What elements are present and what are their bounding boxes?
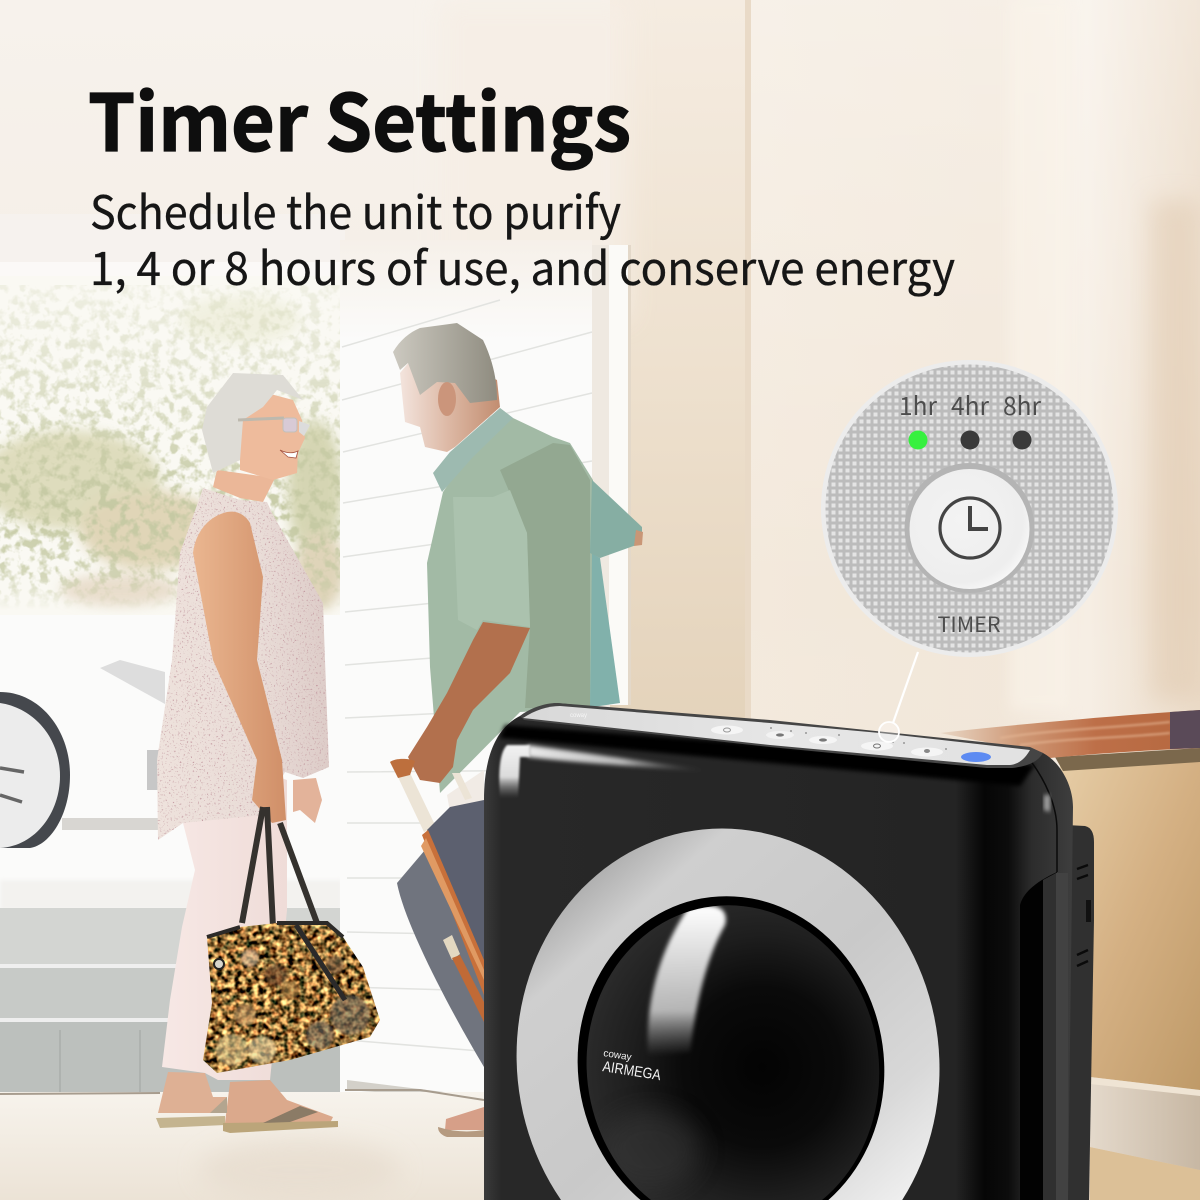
indicator: 1hr active <box>908 430 928 450</box>
side handle recess <box>1020 872 1057 1200</box>
man's back panel <box>500 443 590 708</box>
subtitle: Schedule the unit to purify <box>90 177 621 243</box>
logo: AIRMEGA <box>601 1057 663 1083</box>
feet and sandals <box>156 1072 338 1133</box>
timer labels: 8hr <box>1003 387 1041 423</box>
man's collar <box>433 408 513 492</box>
inner dome <box>587 905 879 1200</box>
man's face <box>400 355 500 452</box>
woman's face <box>240 392 305 480</box>
logo: coway <box>603 1048 632 1063</box>
man's foot and sandal <box>438 1107 484 1137</box>
pants <box>162 763 287 1080</box>
illustration: woman with floral bag <box>156 373 380 1133</box>
leader end marker <box>879 722 899 742</box>
bag handles <box>242 807 317 927</box>
man's sleeve <box>453 490 530 630</box>
side face strip <box>1043 873 1056 1200</box>
smile <box>280 450 298 458</box>
top glare on front face <box>499 745 1050 812</box>
floral handbag <box>203 923 380 1073</box>
panel brand mark: coway <box>570 713 587 719</box>
man's hair <box>393 323 497 403</box>
white door panel <box>340 240 631 1100</box>
timer labels: 4hr <box>951 387 989 423</box>
illustration: man with suitcase <box>390 323 643 1137</box>
suitcase <box>390 759 484 1067</box>
floor <box>0 1090 500 1200</box>
timer labels <box>899 387 1041 423</box>
timer button <box>904 463 1034 593</box>
dark inner rim <box>578 896 884 1200</box>
main body <box>484 703 1073 1200</box>
blouse <box>157 488 329 840</box>
stone steps <box>0 908 345 1096</box>
title: Timer Settings <box>88 62 631 174</box>
wooden table and lower wall <box>940 710 1200 1200</box>
front ring <box>517 829 940 1200</box>
air purifier <box>484 703 1094 1200</box>
leader line <box>893 652 918 723</box>
shadow under the plate <box>500 725 1035 786</box>
blouse print <box>157 488 329 840</box>
man's far forearm <box>634 530 643 546</box>
man's underlayer shirt <box>586 550 620 708</box>
bare arm <box>193 512 286 823</box>
timer callout circle <box>821 360 1118 657</box>
man's trousers <box>447 770 484 812</box>
man's far sleeve <box>590 480 642 558</box>
subtitle: 1, 4 or 8 hours of use, and conserve energy <box>90 233 955 299</box>
indicator: 8hr off <box>1012 430 1032 450</box>
side rear panel <box>1060 825 1094 1200</box>
body seam <box>1030 760 1057 872</box>
parked car <box>0 660 165 848</box>
woman's hair <box>202 373 303 473</box>
top control plate <box>520 703 1043 768</box>
timer label: TIMER <box>938 609 1000 639</box>
blue indicator light <box>961 752 991 762</box>
dome highlight <box>615 906 730 1180</box>
outdoor view through the doorway <box>0 276 345 910</box>
indicator: 4hr off <box>960 430 980 450</box>
far hand <box>293 778 322 823</box>
subtitle <box>90 177 955 299</box>
man's shirt <box>427 408 593 793</box>
man's forearm and hand <box>408 622 530 783</box>
woman's neck <box>213 470 275 502</box>
timer labels: 1hr <box>899 387 937 423</box>
clock icon <box>940 498 1000 558</box>
glasses <box>238 418 310 436</box>
control buttons <box>711 726 947 756</box>
man's ear <box>438 382 456 416</box>
side face edge <box>1056 873 1068 1200</box>
